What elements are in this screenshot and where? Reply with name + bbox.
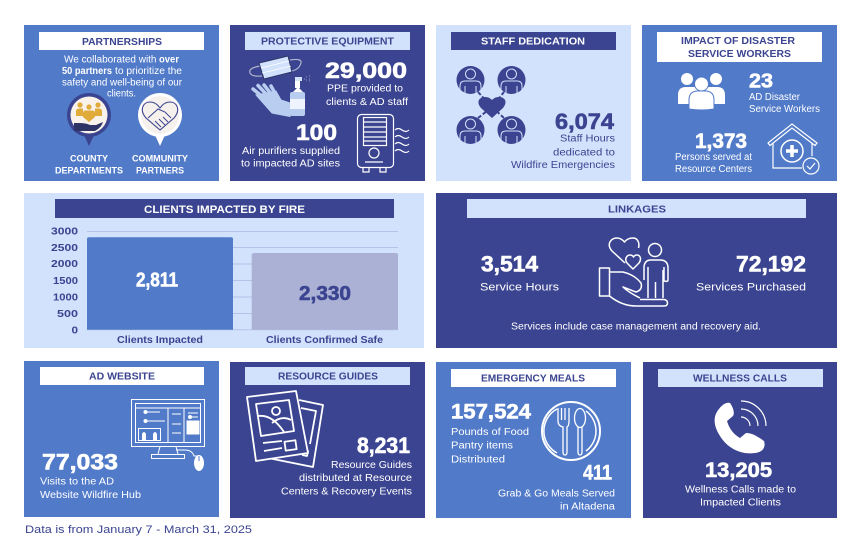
text: partnerships intro: to prioritize the [115, 66, 182, 77]
stat: 100 air purifiers [241, 120, 340, 170]
stat: 8,231 resource guides: Resource Guides [331, 460, 412, 471]
y axis labels: 2000 [51, 258, 78, 270]
stat: 13,205 wellness calls: 13,205 [705, 459, 772, 482]
stat: 411 meals: in Altadena [560, 502, 615, 513]
stat: 411 meals: 411 [583, 462, 612, 485]
icon: face mask [250, 56, 301, 79]
stat: 6,074 staff hours: dedicated to [553, 148, 615, 159]
bar: clients impacted [87, 237, 233, 330]
bar: clients confirmed safe: 2,330 [299, 283, 351, 305]
x axis labels [117, 335, 383, 346]
y axis labels: 3000 [51, 226, 78, 238]
text: partnerships intro: We collaborated with [64, 55, 156, 66]
text: partnerships intro [62, 55, 183, 100]
heading: ad website: AD WEBSITE [89, 371, 155, 383]
stat: 29,000 PPE [325, 58, 408, 108]
stat: 100 air purifiers: 100 [296, 120, 337, 145]
stat: 6,074 staff hours [511, 109, 615, 171]
stat: 23 workers [749, 71, 820, 115]
stat: 77,033 visits: Website Wildfire Hub [40, 490, 141, 501]
stat: 23 workers: Service Workers [749, 104, 820, 115]
icon: spray bottle [290, 76, 310, 116]
stat: 77,033 visits: 77,033 [42, 450, 118, 475]
icon: air purifier [358, 114, 409, 172]
heading: resource guides: RESOURCE GUIDES [278, 371, 378, 383]
bar: clients confirmed safe [252, 253, 398, 330]
icon: hand with hearts and person [600, 238, 668, 306]
y axis labels: 0 [72, 324, 78, 336]
icon: plate with fork and spoon [542, 402, 600, 460]
heading: wellness calls: WELLNESS CALLS [693, 373, 787, 385]
stat: 72,192 services purchased: 72,192 [736, 251, 806, 276]
stat: 72,192 services purchased [696, 251, 806, 294]
labels: partner types: COUNTY [70, 154, 108, 164]
stat: 6,074 staff hours: Wildfire Emergencies [511, 160, 615, 171]
stat: 411 meals [498, 462, 615, 513]
heading: clients impacted by fire: CLIENTS IMPACTED BY FIRE [144, 204, 305, 216]
panel: ad website [24, 361, 219, 517]
labels: partner types [55, 154, 188, 176]
y axis labels: 2500 [51, 242, 78, 254]
heading: impact of disaster service workers: IMPACT OF DISASTER [681, 35, 795, 47]
stat: 157,524 pounds: Distributed [451, 454, 505, 465]
stat: 72,192 services purchased: Services Purchased [696, 282, 806, 294]
heading: protective equipment: PROTECTIVE EQUIPMENT [261, 36, 395, 48]
stat: 13,205 wellness calls: Wellness Calls made to [685, 484, 796, 495]
stat: 77,033 visits [40, 450, 141, 501]
stat: 29,000 PPE: clients & AD staff [326, 97, 408, 108]
icon: staff and heart network [456, 66, 526, 144]
panel: impact of disaster service workers [642, 25, 837, 181]
y axis labels: 500 [57, 308, 78, 320]
icon: phone with signal [715, 401, 766, 453]
heading: resource guides [245, 367, 410, 385]
stat: 1,373 persons: 1,373 [695, 130, 747, 153]
labels: partner types: PARTNERS [136, 166, 184, 176]
stat: 23 workers: 23 [749, 71, 773, 93]
stat: 157,524 pounds: Pantry items [451, 441, 513, 452]
panel: staff dedication [436, 25, 631, 181]
heading: protective equipment [245, 32, 410, 50]
stat: 3,514 service hours: 3,514 [481, 251, 539, 276]
y axis labels: 1500 [53, 275, 78, 287]
panel: clients impacted by fire [24, 193, 424, 348]
text: partnerships intro: clients. [107, 89, 136, 100]
stat: 1,373 persons: Persons served at [675, 152, 752, 163]
heading: impact of disaster service workers [657, 32, 822, 62]
stat: 8,231 resource guides [281, 433, 412, 498]
stat: 8,231 resource guides: 8,231 [357, 433, 410, 458]
panel: wellness calls [643, 362, 837, 518]
stat: 29,000 PPE: 29,000 [325, 58, 407, 83]
panel: protective equipment [230, 25, 425, 181]
icon: brochures [247, 391, 323, 467]
stat: 411 meals: Grab & Go Meals Served [498, 488, 615, 499]
text: services note: Services include case management and recovery aid. [511, 322, 761, 333]
panel: partnerships [24, 25, 219, 181]
stat: 1,373 persons: Resource Centers [675, 164, 752, 175]
heading: impact of disaster service workers: SERVICE WORKERS [688, 48, 791, 60]
stat: 6,074 staff hours: Staff Hours [560, 134, 615, 145]
stat: 1,373 persons [675, 130, 752, 175]
text: partnerships intro: 50 partners [62, 66, 112, 77]
heading: staff dedication: STAFF DEDICATION [481, 36, 585, 48]
stat: 157,524 pounds [451, 401, 531, 465]
icon: medical house [768, 124, 819, 174]
icon: computer showing website [132, 400, 204, 471]
stat: 77,033 visits: Visits to the AD [40, 477, 114, 488]
stat: 157,524 pounds: 157,524 [451, 401, 531, 424]
heading: emergency meals [451, 369, 616, 387]
icon: people group [678, 73, 725, 110]
footnote: data period: Data is from January 7 - March 31, 2025 [25, 524, 252, 536]
stat: 6,074 staff hours: 6,074 [555, 109, 615, 134]
icon: community partners [138, 93, 182, 146]
stat: 8,231 resource guides: Centers & Recovery Events [281, 487, 412, 498]
labels: partner types: COMMUNITY [132, 154, 188, 164]
heading: partnerships [39, 32, 204, 50]
heading: linkages: LINKAGES [608, 204, 666, 216]
x axis labels: Clients Impacted [117, 335, 203, 346]
y axis labels: 1000 [53, 292, 78, 304]
labels: partner types: DEPARTMENTS [55, 166, 123, 176]
panel: linkages [436, 193, 837, 348]
stat: 23 workers: AD Disaster [749, 92, 801, 103]
text: partnerships intro: safety and well-being of our [62, 78, 183, 89]
panel: emergency meals [436, 362, 631, 518]
icon: county departments [67, 93, 111, 146]
bar chart [51, 226, 398, 346]
heading: ad website [40, 367, 204, 385]
stat: 3,514 service hours: Service Hours [480, 282, 560, 294]
stat: 157,524 pounds: Pounds of Food [451, 427, 529, 438]
stat: 13,205 wellness calls [685, 459, 796, 508]
panel: resource guides [230, 362, 425, 518]
y axis labels [51, 226, 78, 336]
stat: 3,514 service hours [480, 251, 560, 294]
stat: 100 air purifiers: Air purifiers supplied [242, 146, 340, 157]
heading: staff dedication [451, 32, 616, 50]
stat: 100 air purifiers: to impacted AD sites [241, 159, 340, 170]
stat: 8,231 resource guides: distributed at Resource [299, 473, 412, 484]
x axis labels: Clients Confirmed Safe [266, 335, 383, 346]
icon: glove [253, 85, 290, 116]
stat: 13,205 wellness calls: Impacted Clients [700, 497, 781, 508]
stat: 29,000 PPE: PPE provided to [327, 84, 403, 95]
heading: wellness calls [658, 369, 823, 387]
text: partnerships intro: over [159, 55, 179, 66]
heading: partnerships: PARTNERSHIPS [82, 36, 162, 48]
bar: clients impacted: 2,811 [136, 269, 178, 291]
heading: clients impacted by fire [55, 199, 394, 218]
heading: linkages [467, 199, 806, 218]
heading: emergency meals: EMERGENCY MEALS [481, 372, 585, 384]
